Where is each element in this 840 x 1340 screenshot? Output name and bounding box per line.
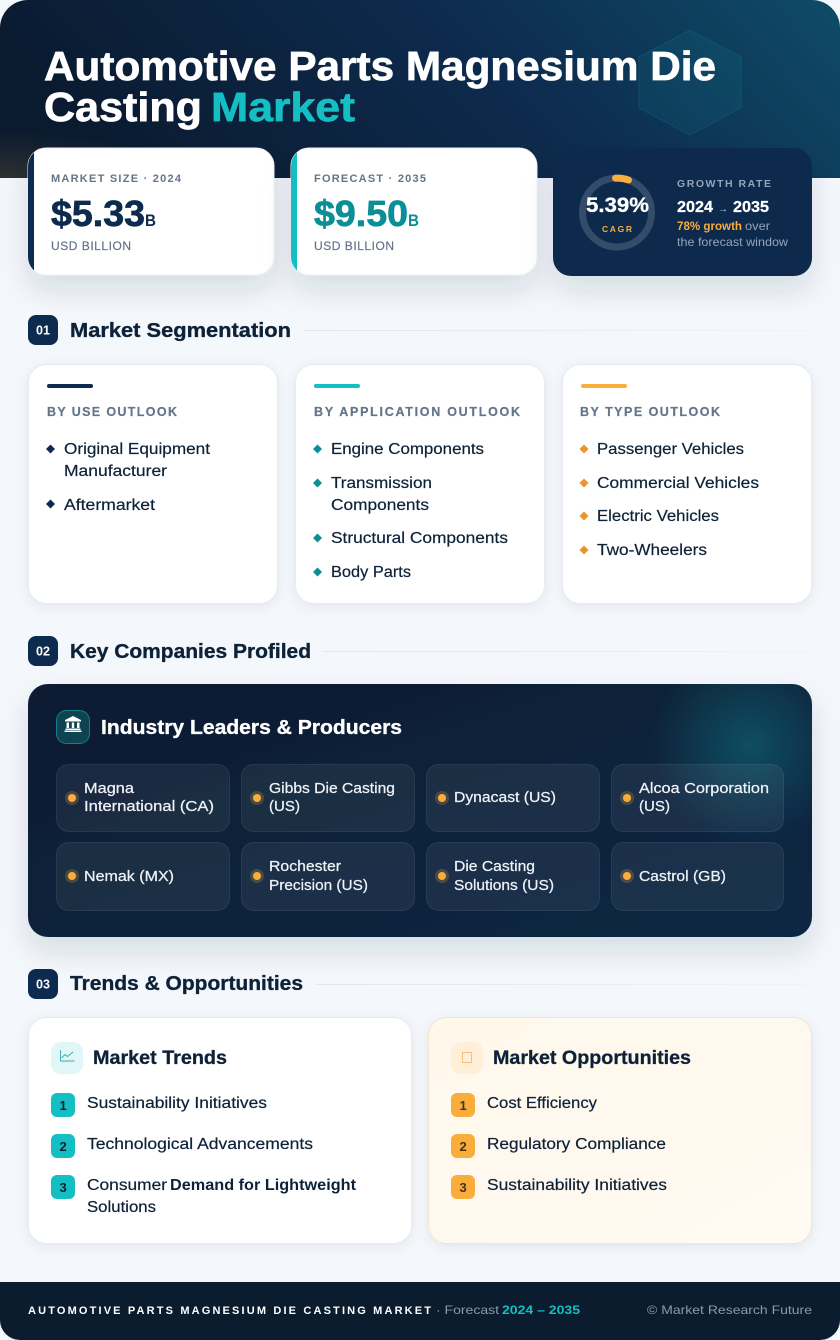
footer: · Forecast	[436, 1303, 500, 1317]
opportunity 1: Cost Efficiency	[487, 1095, 597, 1112]
trend 3: 3	[60, 1180, 67, 1195]
trend 3	[51, 1175, 356, 1216]
panel heading: Industry Leaders & Producers	[101, 716, 402, 739]
list items: Original Equipment	[64, 441, 211, 458]
company chip: Dynacast	[426, 764, 600, 832]
title: Market	[211, 84, 355, 130]
panel: by type outlook	[562, 364, 812, 604]
trend 3: Solutions	[87, 1199, 156, 1216]
growth text: 2024	[677, 199, 713, 216]
list items: Transmission	[331, 475, 432, 492]
panel: by application outlook: BY APPLICATION OUTLOOK	[314, 405, 520, 419]
list items: Aftermarket	[64, 497, 156, 514]
stat card: market size 2024: MARKET SIZE · 2024	[51, 173, 182, 185]
opportunity 3	[451, 1175, 667, 1199]
company chip: Rochester: Rochester	[269, 859, 341, 875]
company chip: Gibbs: Gibbs Die Casting	[269, 781, 395, 797]
list items: Passenger Vehicles	[597, 441, 744, 458]
title: Automotive Parts Magnesium Die	[44, 43, 716, 89]
footer: © Market Research Future	[647, 1303, 812, 1317]
stat card: market size 2024: USD BILLION	[51, 239, 131, 253]
hexagon decoration	[639, 30, 741, 135]
stat card: forecast 2035: $9.50	[314, 193, 408, 234]
company chip: Alcoa: Alcoa Corporation	[639, 781, 769, 797]
company chip: Gibbs: (US)	[269, 799, 300, 815]
list items: Commercial Vehicles	[597, 475, 759, 492]
CAGR ring: CAGR	[602, 224, 632, 234]
trend 2: Technological Advancements	[87, 1136, 313, 1153]
list items: Structural Components	[331, 530, 508, 547]
opportunity 3: Sustainability Initiatives	[487, 1177, 667, 1194]
opportunity 3: 3	[460, 1180, 467, 1195]
stat card: forecast 2035	[291, 148, 537, 275]
section heading 01	[28, 315, 812, 345]
company chip: Die Casting Solutions: Solutions (US)	[454, 878, 554, 894]
section heading 03	[28, 969, 812, 999]
trend 2: 2	[60, 1139, 67, 1154]
company chip: Nemak: Nemak (MX)	[84, 869, 174, 885]
icon: bank building	[56, 710, 90, 744]
section heading 01: 01	[36, 322, 50, 338]
stat card: forecast 2035: USD BILLION	[314, 239, 394, 253]
panel: market trends	[28, 1018, 412, 1244]
stat card: market size 2024: $5.33	[51, 193, 145, 234]
list items: Components	[331, 497, 429, 514]
panel: market opportunities	[428, 1018, 812, 1244]
footer: 2024 – 2035	[502, 1303, 580, 1317]
growth text: the forecast window	[677, 235, 788, 249]
panel: by use outlook	[28, 364, 278, 604]
list items	[580, 441, 759, 559]
footer: AUTOMOTIVE PARTS MAGNESIUM DIE CASTING MARKET	[28, 1305, 431, 1317]
trend 1: Sustainability Initiatives	[87, 1095, 267, 1112]
list items: Manufacturer	[64, 463, 167, 480]
growth text: 2035	[733, 199, 769, 216]
list items	[313, 441, 508, 581]
icon: placeholder glyph	[451, 1042, 483, 1074]
header band	[0, 0, 840, 178]
opportunity 2: 2	[460, 1139, 467, 1154]
growth text: →	[718, 204, 728, 215]
company chip: Rochester	[242, 842, 414, 910]
CAGR ring	[582, 178, 652, 247]
list items	[46, 441, 211, 514]
growth text	[677, 178, 788, 249]
company chip: Castrol	[612, 842, 784, 910]
trend 1	[51, 1093, 267, 1117]
CAGR ring: 5.39%	[586, 194, 649, 217]
section heading 03: 03	[36, 976, 50, 992]
footer	[0, 1282, 840, 1340]
opportunity 1: 1	[460, 1098, 467, 1113]
opportunity 1	[451, 1093, 597, 1117]
panel: market opportunities: Market Opportunities	[493, 1047, 691, 1069]
growth text: over	[745, 219, 770, 233]
growth text: 78% growth	[677, 219, 742, 233]
company chip: Gibbs	[242, 764, 414, 832]
company chip: Castrol: Castrol (GB)	[639, 869, 726, 885]
trend 1: 1	[60, 1098, 67, 1113]
company chip: Rochester: Precision (US)	[269, 878, 368, 894]
company chip: Die Casting Solutions: Die Casting	[454, 859, 535, 875]
section heading 02	[28, 636, 812, 666]
panel: by type outlook: BY TYPE OUTLOOK	[580, 405, 720, 419]
trend 3: Consumer	[87, 1177, 167, 1194]
stat card: forecast 2035: B	[408, 211, 419, 230]
list items: Two-Wheelers	[597, 542, 707, 559]
section heading 02: Key Companies Profiled	[70, 640, 311, 663]
opportunity 2: Regulatory Compliance	[487, 1136, 666, 1153]
company chip: Nemak	[56, 842, 230, 910]
company chip: Magna: Magna	[84, 781, 135, 797]
section heading 02: 02	[36, 644, 50, 658]
trend 3: Demand for Lightweight	[170, 1177, 356, 1194]
panel: by use outlook: BY USE OUTLOOK	[47, 405, 177, 419]
company chip: Magna: International (CA)	[84, 799, 214, 815]
panel: market trends: Market Trends	[93, 1047, 227, 1069]
list items: Engine Components	[331, 441, 484, 458]
growth text: GROWTH RATE	[677, 178, 771, 190]
panel: by application outlook	[296, 364, 544, 604]
icon: line chart	[51, 1042, 83, 1074]
title	[44, 43, 716, 130]
list items: Body Parts	[331, 564, 411, 581]
stat card: market size 2024	[28, 148, 274, 275]
company chip: Die Casting Solutions	[426, 842, 600, 910]
list items: Electric Vehicles	[597, 508, 719, 525]
section heading 03: Trends & Opportunities	[70, 972, 303, 995]
stat card: CAGR growth rate	[553, 148, 812, 276]
stat card: market size 2024: B	[145, 211, 156, 230]
company chip: Dynacast: Dynacast (US)	[454, 790, 556, 806]
trend 2	[51, 1134, 313, 1158]
company chip: Alcoa	[612, 764, 784, 832]
company chip: Alcoa: (US)	[639, 799, 670, 815]
panel: industry leaders	[28, 684, 812, 937]
section heading 01: Market Segmentation	[70, 319, 291, 342]
stat card: forecast 2035: FORECAST · 2035	[314, 173, 426, 185]
title: Casting	[44, 84, 202, 130]
opportunity 2	[451, 1134, 666, 1158]
company chip: Magna	[56, 764, 230, 832]
